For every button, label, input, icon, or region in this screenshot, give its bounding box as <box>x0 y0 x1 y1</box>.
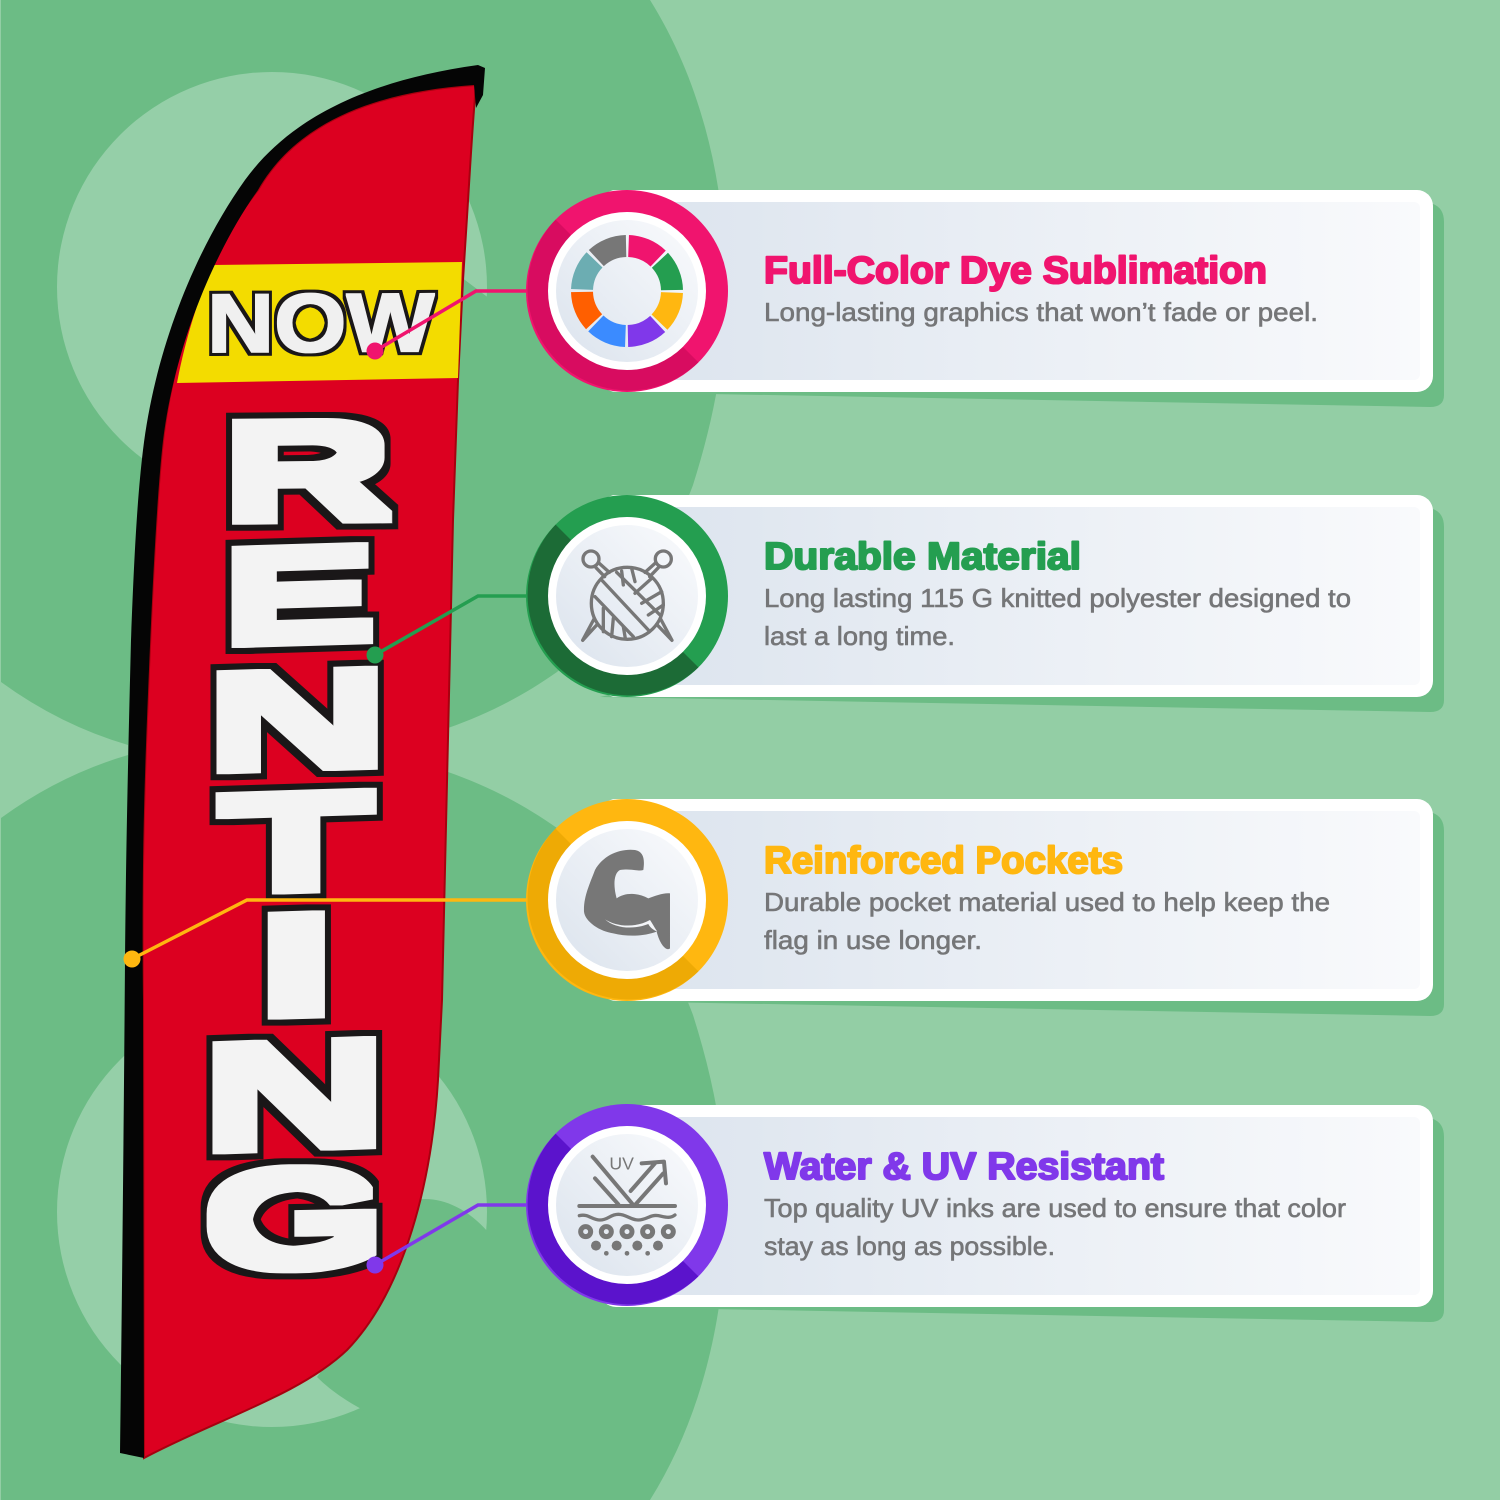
badge: UV resistance <box>526 1104 728 1306</box>
flag word: RENTING: E <box>222 519 376 670</box>
connector: yellow <box>124 900 530 968</box>
icon: UV reflection on skin: UV <box>609 1154 634 1174</box>
card 4: Water & UV Resistant <box>600 1105 1444 1322</box>
flag word: RENTING: N <box>201 1010 388 1180</box>
body text: Long-lasting graphics that won’t fade or peel. <box>764 297 1318 327</box>
body text line 2: last a long time. <box>764 621 955 651</box>
body text line 2: flag in use longer. <box>764 925 982 955</box>
heading: Durable Material <box>764 536 1081 578</box>
connector: green <box>366 596 530 664</box>
badge: yarn <box>526 495 728 697</box>
flag word: RENTING: G <box>203 1140 385 1297</box>
flag word: RENTING: I <box>253 885 340 1044</box>
flag word: RENTING: N <box>206 643 389 798</box>
flag black sleeve <box>120 65 485 1458</box>
flag red body <box>143 85 476 1458</box>
flag word: RENTING <box>201 394 391 1297</box>
card 2: Durable Material <box>600 495 1444 712</box>
connector: pink <box>366 291 530 360</box>
heading: Reinforced Pockets <box>764 840 1123 882</box>
icon: color wheel <box>563 227 691 355</box>
body text: Long lasting 115 G knitted polyester designed to <box>764 583 1351 613</box>
flag word: RENTING: T <box>219 764 374 919</box>
connector: purple <box>366 1205 530 1274</box>
icon: UV reflection on skin <box>579 1154 675 1256</box>
heading: Water & UV Resistant <box>764 1146 1164 1188</box>
flag word: NOW: NOW <box>207 276 435 370</box>
card 1: Full-Color Dye Sublimation <box>600 190 1444 407</box>
badge: color wheel <box>526 190 728 392</box>
flag <box>120 65 485 1458</box>
icon: yarn ball and needles <box>583 551 672 640</box>
card 3: Reinforced Pockets <box>600 799 1444 1016</box>
heading: Full-Color Dye Sublimation <box>764 250 1267 292</box>
flag yellow band <box>177 262 462 383</box>
flag word: RENTING: R <box>222 394 391 548</box>
body text line 2: stay as long as possible. <box>764 1231 1055 1261</box>
body text: Durable pocket material used to help keep the <box>764 887 1330 917</box>
icon: flexed arm <box>584 850 670 949</box>
body text: Top quality UV inks are used to ensure that color <box>764 1193 1346 1223</box>
badge: muscle arm <box>526 799 728 1001</box>
